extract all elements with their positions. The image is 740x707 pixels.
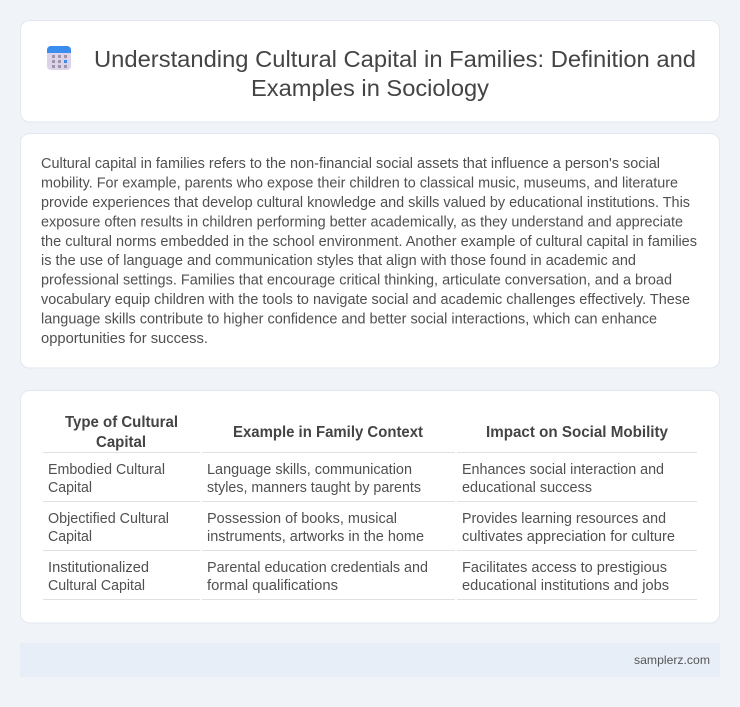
footer: samplerz.com — [634, 653, 710, 667]
title: Examples in Sociology — [251, 75, 489, 101]
table row: embodied: styles, manners taught by parents — [207, 480, 421, 496]
table row: institutionalized: Cultural Capital — [48, 578, 145, 594]
table row: embodied: Enhances social interaction and — [462, 462, 664, 478]
table header: Capital — [96, 434, 146, 451]
table row: objectified: Capital — [48, 529, 92, 545]
table row: embodied: Capital — [48, 480, 92, 496]
table header: Type of Cultural — [65, 414, 178, 431]
title: Understanding Cultural Capital in Families: Definition and — [94, 46, 696, 72]
text block: description paragraph: mobility. For example, parents who expose their children to classical music, museums, and literature — [41, 175, 678, 191]
table header — [65, 414, 668, 451]
text block: description paragraph: the cultural norms embedded in the school environment. Another example of cultural capital in families — [41, 234, 697, 250]
table row: institutionalized: educational institutions and jobs — [462, 578, 669, 594]
table row: objectified: Provides learning resources and — [462, 511, 666, 527]
panel: description — [20, 134, 720, 368]
text block: description paragraph: provide experiences that develop cultural knowledge and skills valued by educational institutions. This — [41, 195, 690, 211]
table row: institutionalized: Parental education credentials and — [207, 560, 428, 576]
text block: description paragraph: opportunities for success. — [41, 331, 208, 347]
table row: objectified — [48, 511, 675, 545]
panel: table — [20, 390, 720, 623]
text block: description paragraph: vocabulary equip children with the tools to navigate social and academic challenges effectively. These — [41, 292, 690, 308]
table row: objectified: instruments, artworks in the home — [207, 529, 424, 545]
table row: embodied: educational success — [462, 480, 592, 496]
text block: description paragraph: Cultural capital in families refers to the non-financial social assets that influence a person's social — [41, 156, 660, 172]
text block: description paragraph: exposure often results in children performing better academically, as they understand and appreciate — [41, 214, 683, 230]
text block: description paragraph: professional settings. Families that encourage critical thinking, articulate conversation, and a broad — [41, 273, 672, 289]
table row: institutionalized: formal qualifications — [207, 578, 338, 594]
table row: embodied: Embodied Cultural — [48, 462, 165, 478]
table row: embodied: Language skills, communication — [207, 462, 412, 478]
table row: objectified: Possession of books, musical — [207, 511, 397, 527]
text block: description paragraph — [41, 156, 697, 347]
table row: embodied — [48, 462, 664, 496]
table header: Impact on Social Mobility — [486, 424, 668, 441]
table header: Example in Family Context — [233, 424, 423, 441]
footer — [20, 643, 720, 677]
text block: description paragraph: is the use of language and communication styles that align with those found in academic and — [41, 253, 636, 269]
table row: institutionalized: Institutionalized — [48, 560, 149, 576]
title — [94, 46, 696, 101]
icon: calendar — [47, 46, 71, 70]
table row: institutionalized — [48, 560, 669, 594]
table row: objectified: Objectified Cultural — [48, 511, 169, 527]
panel: title header — [20, 20, 720, 122]
table row: institutionalized: Facilitates access to prestigious — [462, 560, 667, 576]
table row: objectified: cultivates appreciation for culture — [462, 529, 675, 545]
text block: description paragraph: language skills contribute to higher confidence and better social interactions, which can enhance — [41, 312, 657, 328]
